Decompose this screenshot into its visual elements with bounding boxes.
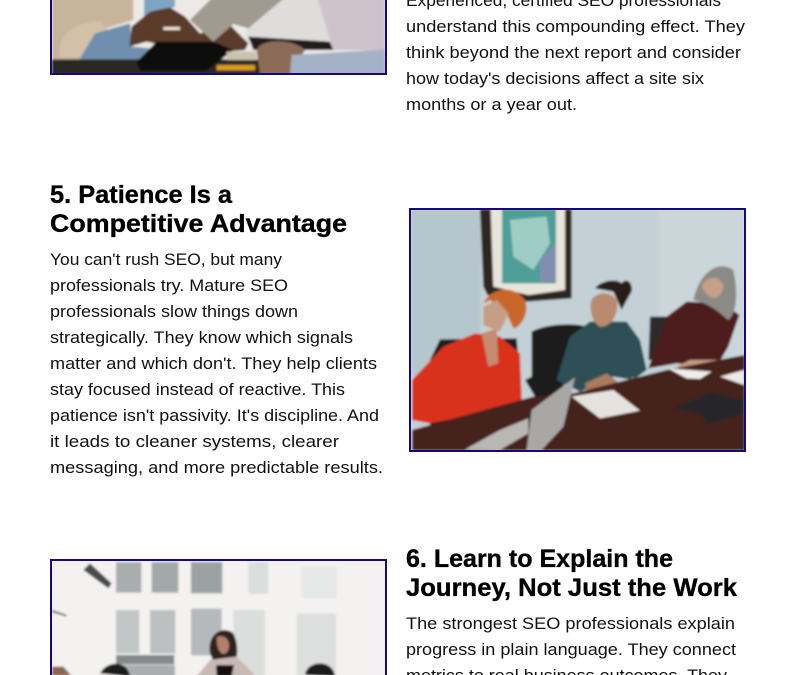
photo: three women in a meeting room (410, 209, 745, 451)
text block: section 5 body: messaging, and more predictable results. (50, 458, 383, 477)
heading: section 6: Journey, Not Just the Work (406, 574, 737, 602)
text block: section 5 body (50, 250, 383, 477)
text block: section 5 body: stay focused instead of reactive. This (50, 380, 345, 399)
text block: section 5 body: matter and which don't. They help clients (50, 354, 377, 373)
heading: section 5: Competitive Advantage (50, 210, 347, 238)
photo: hands holding a tablet at a desk (51, 0, 386, 75)
text block: section 4 ending: understand this compounding effect. They (406, 17, 746, 36)
text block: section 6 body (406, 614, 736, 675)
text block: section 5 body: patience isn't passivity. It's discipline. And (50, 406, 379, 425)
text block: section 5 body: strategically. They know which signals (50, 328, 353, 347)
text block: section 5 body: it leads to cleaner systems, clearer (50, 432, 339, 451)
text block: section 5 body: You can't rush SEO, but many (50, 250, 283, 269)
text block: section 4 ending: think beyond the next report and consider (406, 43, 741, 62)
text block: section 4 ending: how today's decisions affect a site six (406, 69, 705, 88)
heading: section 5 (50, 181, 347, 238)
text block: section 6 body: The strongest SEO professionals explain (406, 614, 735, 633)
photo: woman presenting in a bright office (51, 560, 386, 675)
heading: section 6: 6. Learn to Explain the (406, 545, 673, 573)
text block: section 4 ending (406, 0, 746, 114)
heading: section 6 (406, 545, 737, 602)
text block: section 6 body: progress in plain language. They connect (406, 640, 736, 659)
text block: section 4 ending: months or a year out. (406, 95, 577, 114)
text block: section 5 body: professionals slow things down (50, 302, 298, 321)
text block: section 5 body: professionals try. Mature SEO (50, 276, 288, 295)
heading: section 5: 5. Patience Is a (50, 181, 233, 209)
